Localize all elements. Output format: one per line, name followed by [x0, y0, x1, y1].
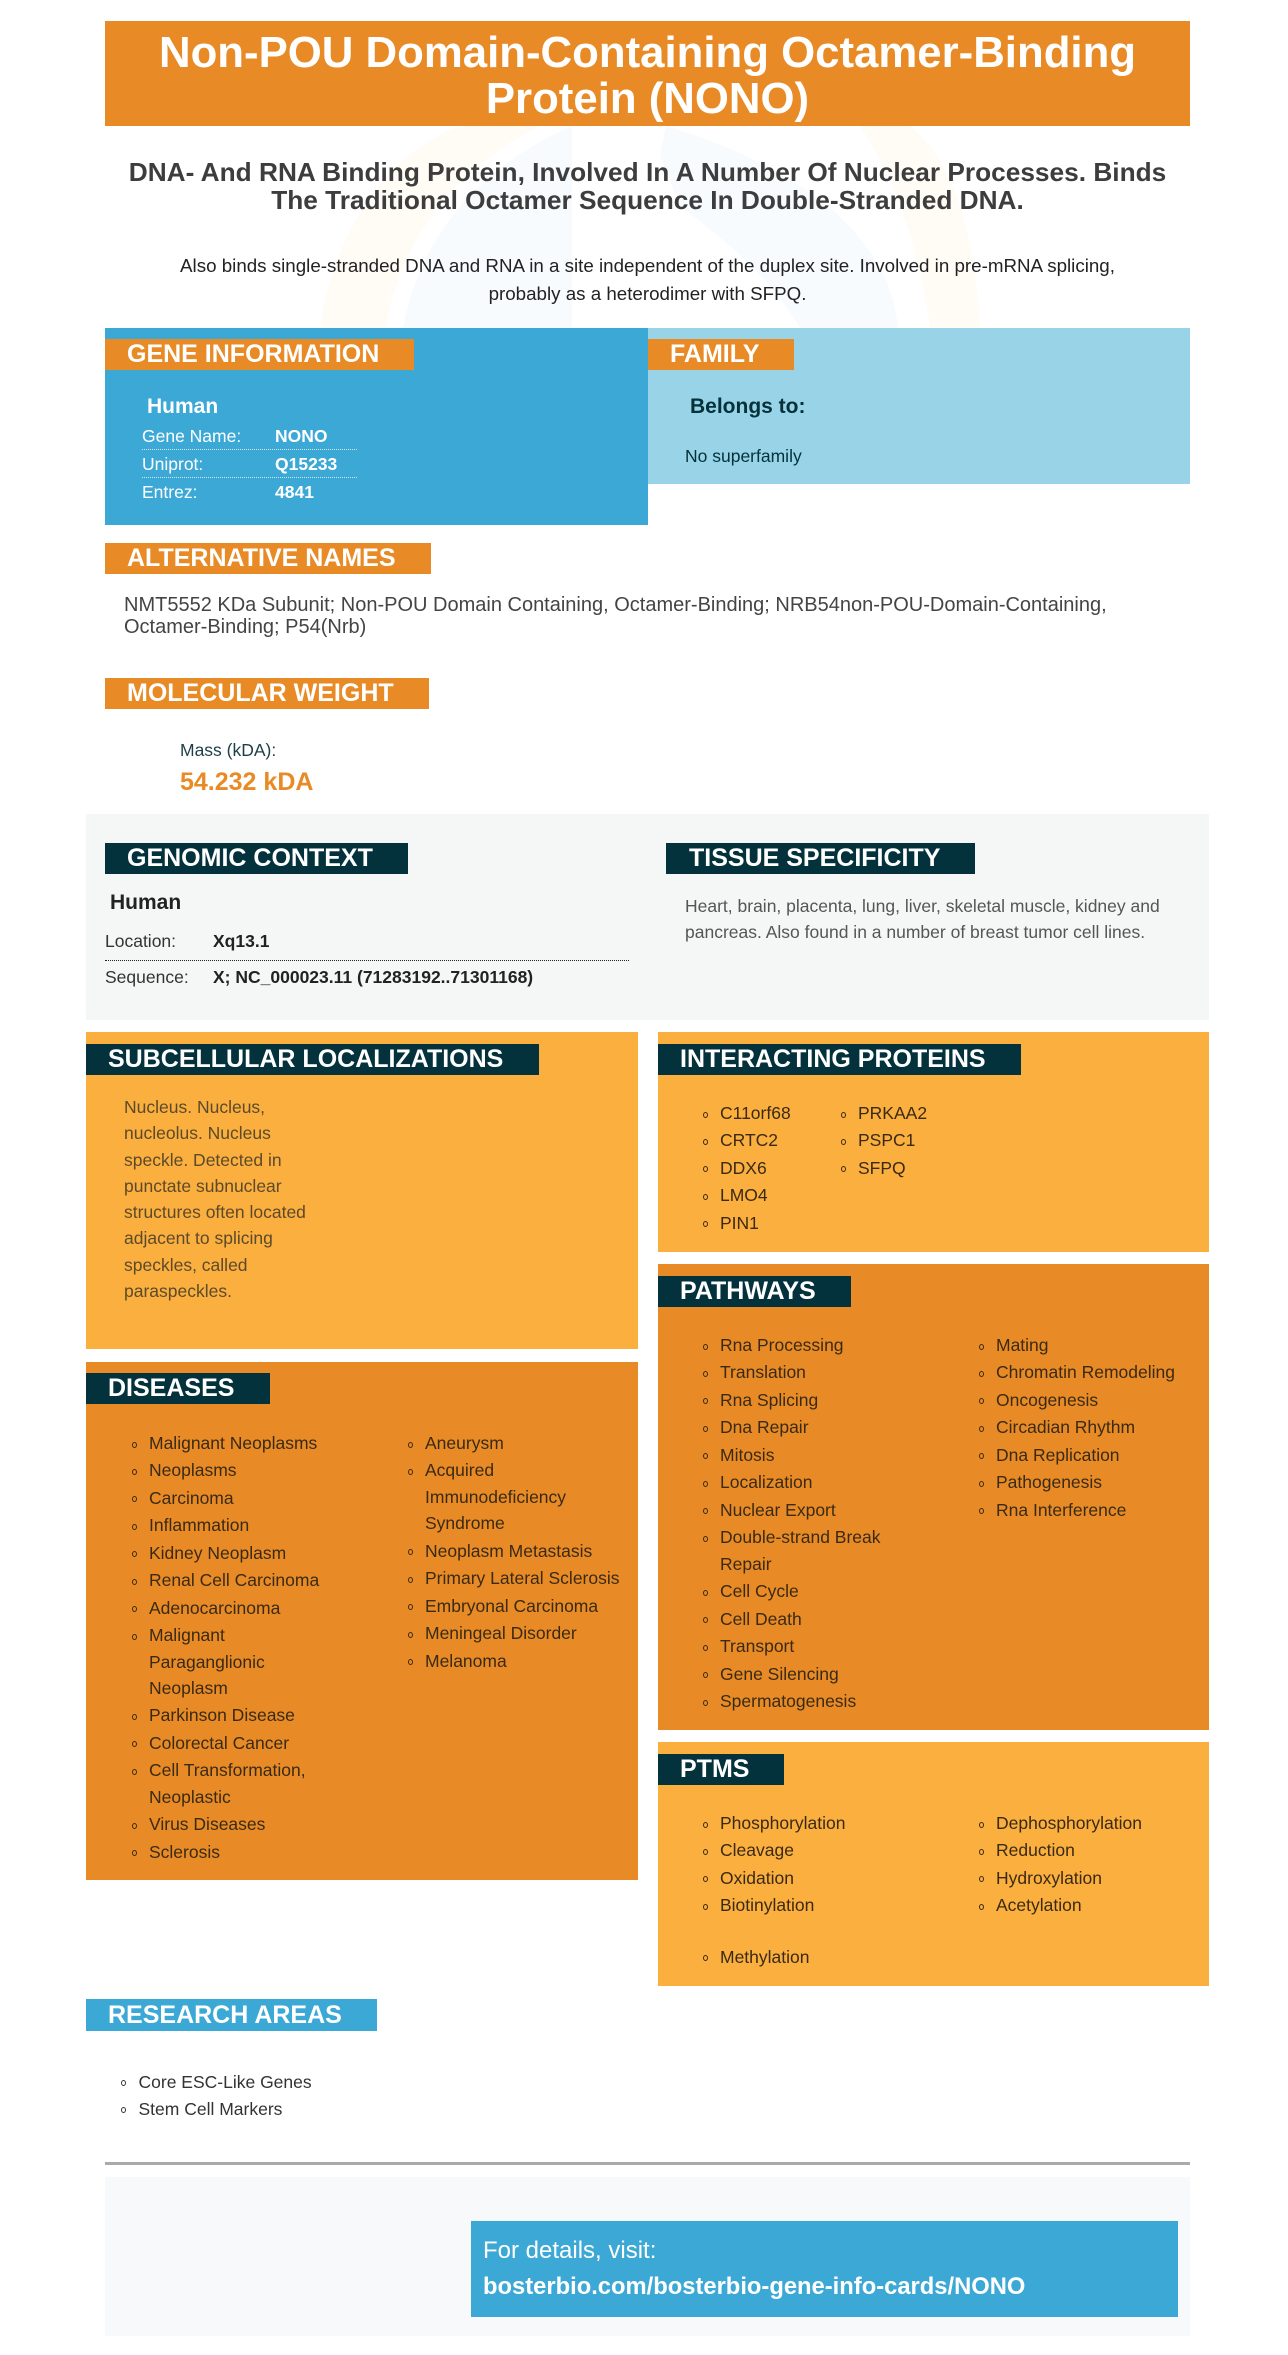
heading: subcellular localizations: SUBCELLULAR LOCALIZATIONS: [108, 1045, 503, 1073]
protein list column 1: CRTC2: [720, 1130, 778, 1150]
disease list column 1: Kidney Neoplasm: [149, 1543, 286, 1563]
pathway list column 1: Mitosis: [720, 1445, 774, 1465]
localization text: speckles, called: [124, 1255, 248, 1275]
pathway list column 1: Rna Processing: [720, 1335, 844, 1355]
heading: family: [648, 339, 794, 370]
species label: Human: [110, 891, 181, 914]
PTM list column 2: Reduction: [996, 1840, 1075, 1860]
localization text: [124, 1097, 306, 1301]
alternative names text: NMT5552 KDa Subunit; Non-POU Domain Containing, Octamer-Binding; NRB54non-POU-Domain-Containing,: [124, 594, 1107, 616]
callout label: For details, visit:: [483, 2237, 656, 2264]
pathway list column 1: Cell Cycle: [720, 1581, 799, 1601]
PTM list column 1: Oxidation: [720, 1868, 794, 1888]
tissue specificity text: [685, 896, 1160, 942]
pathway list column 1: Localization: [720, 1472, 812, 1492]
pathway list column 1: Rna Splicing: [720, 1390, 818, 1410]
pathway list column 1: Spermatogenesis: [720, 1691, 856, 1711]
heading: PTMs: [658, 1754, 784, 1785]
callout url: bosterbio.com/bosterbio-gene-info-cards/NONO: [483, 2273, 1025, 2300]
pathway list column 2: Circadian Rhythm: [996, 1417, 1135, 1437]
disease list column 1: Colorectal Cancer: [149, 1733, 289, 1753]
title: Non-POU Domain-Containing Octamer-Binding: [159, 28, 1136, 77]
callout: details link: [471, 2221, 1178, 2317]
localization text: nucleolus. Nucleus: [124, 1123, 271, 1143]
panel: genomic context and tissue specificity: [86, 814, 1209, 1020]
disease list column 1: Parkinson Disease: [149, 1705, 295, 1725]
pathway list column 1: Cell Death: [720, 1609, 802, 1629]
alternative names text: [124, 594, 1107, 638]
pathway list column 2: Pathogenesis: [996, 1472, 1102, 1492]
heading: research areas: RESEARCH AREAS: [108, 2001, 342, 2029]
heading: interacting proteins: INTERACTING PROTEINS: [680, 1045, 986, 1073]
gene details table: Q15233: [275, 454, 337, 474]
research areas list: Stem Cell Markers: [138, 2099, 282, 2119]
PTM list column 2: Hydroxylation: [996, 1868, 1102, 1888]
panel: pathways: [658, 1264, 1209, 1730]
disease list column 2: Melanoma: [425, 1650, 507, 1670]
disease list column 2: Primary Lateral Sclerosis: [425, 1568, 620, 1588]
protein list column 1: LMO4: [720, 1185, 768, 1205]
protein list column 1: DDX6: [720, 1158, 767, 1178]
subtitle: [129, 157, 1166, 215]
heading: diseases: [86, 1373, 270, 1404]
disease list column 1: Neoplasms: [149, 1460, 237, 1480]
disease list column 1: Virus Diseases: [149, 1814, 265, 1834]
disease list column 2: Embryonal Carcinoma: [425, 1596, 598, 1616]
disease list column 2: Acquired: [425, 1460, 494, 1480]
panel: gene information: [105, 328, 648, 525]
PTM list column 1: [703, 1813, 846, 1967]
heading: pathways: PATHWAYS: [680, 1277, 816, 1305]
PTM list column 1: Cleavage: [720, 1840, 794, 1860]
genomic location table: X; NC_000023.11 (71283192..71301168): [213, 967, 533, 987]
localization text: adjacent to splicing: [124, 1228, 273, 1248]
localization text: speckle. Detected in: [124, 1150, 282, 1170]
PTM list column 1: Phosphorylation: [720, 1813, 846, 1833]
heading: tissue specificity: TISSUE SPECIFICITY: [689, 844, 940, 872]
protein list column 2: PRKAA2: [858, 1103, 927, 1123]
localization text: punctate subnuclear: [124, 1176, 282, 1196]
disease list column 1: Cell Transformation,: [149, 1760, 306, 1780]
gene details table: Gene Name:: [142, 426, 241, 446]
localization text: Nucleus. Nucleus,: [124, 1097, 265, 1117]
PTM list column 2: Dephosphorylation: [996, 1813, 1142, 1833]
description: [180, 254, 1115, 304]
panel: PTMs: [658, 1742, 1209, 1986]
disease list column 1: Renal Cell Carcinoma: [149, 1570, 319, 1590]
genomic location table: Location:: [105, 931, 176, 951]
PTM list column 1: Methylation: [720, 1947, 810, 1967]
pathway list column 2: Oncogenesis: [996, 1390, 1098, 1410]
genomic location table: Xq13.1: [213, 931, 269, 951]
PTM list column 1: Biotinylation: [720, 1895, 814, 1915]
disease list column 1: Paraganglionic: [149, 1652, 265, 1672]
disease list column 2: Aneurysm: [425, 1433, 504, 1453]
disease list column 2: [408, 1433, 620, 1670]
genomic location table: Sequence:: [105, 967, 189, 987]
gene details table: Entrez:: [142, 482, 197, 502]
alternative names text: Octamer-Binding; P54(Nrb): [124, 616, 366, 638]
genomic location table: [105, 931, 629, 987]
protein list column 1: C11orf68: [720, 1103, 791, 1123]
pathway list column 2: Mating: [996, 1335, 1049, 1355]
subtitle: The Traditional Octamer Sequence In Double-Stranded DNA.: [271, 185, 1024, 215]
subtitle: DNA- And RNA Binding Protein, Involved In A Number Of Nuclear Processes. Binds: [129, 157, 1166, 187]
heading: molecular weight: MOLECULAR WEIGHT: [127, 679, 394, 707]
tissue specificity text: Heart, brain, placenta, lung, liver, skeletal muscle, kidney and: [685, 896, 1160, 916]
disease list column 1: Carcinoma: [149, 1488, 234, 1508]
protein list column 2: [841, 1103, 927, 1178]
heading: diseases: DISEASES: [108, 1374, 234, 1402]
localization text: paraspeckles.: [124, 1281, 232, 1301]
superfamily text: No superfamily: [685, 446, 802, 466]
footer panel: [105, 2177, 1190, 2336]
gene details table: NONO: [275, 426, 328, 446]
disease list column 1: Inflammation: [149, 1515, 249, 1535]
gene details table: Uniprot:: [142, 454, 203, 474]
research areas list: [121, 2072, 312, 2119]
description: Also binds single-stranded DNA and RNA in a site independent of the duplex site. Involved in pre-mRNA splicing,: [180, 254, 1115, 276]
pathway list column 2: Dna Replication: [996, 1445, 1120, 1465]
pathway list column 1: Double-strand Break: [720, 1527, 880, 1547]
disease list column 1: Malignant Neoplasms: [149, 1433, 317, 1453]
description: probably as a heterodimer with SFPQ.: [489, 282, 806, 304]
pathway list column 2: [979, 1335, 1175, 1520]
mass label: Mass (kDA):: [180, 740, 276, 760]
tissue specificity text: pancreas. Also found in a number of breast tumor cell lines.: [685, 922, 1145, 942]
localization text: structures often located: [124, 1202, 306, 1222]
title: [105, 21, 1190, 126]
disease list column 1: Sclerosis: [149, 1842, 220, 1862]
mass value: 54.232 kDA: [180, 768, 313, 796]
panel: subcellular localizations: [86, 1032, 638, 1349]
gene details table: [142, 426, 357, 502]
title: Protein (NONO): [486, 74, 809, 123]
gene details table: 4841: [275, 482, 314, 502]
pathway list column 2: Rna Interference: [996, 1500, 1126, 1520]
species label: Human: [147, 395, 218, 418]
disease list column 1: [132, 1433, 320, 1862]
protein list column 2: SFPQ: [858, 1158, 906, 1178]
disease list column 2: Syndrome: [425, 1513, 505, 1533]
pathway list column 1: Transport: [720, 1636, 794, 1656]
heading: family: FAMILY: [670, 340, 759, 368]
disease list column 1: Malignant: [149, 1625, 225, 1645]
pathway list column 1: Dna Repair: [720, 1417, 809, 1437]
panel: family: [648, 328, 1190, 484]
protein list column 2: PSPC1: [858, 1130, 915, 1150]
PTM list column 2: [979, 1813, 1142, 1915]
belongs to label: Belongs to:: [690, 395, 806, 418]
protein list column 1: [703, 1103, 791, 1233]
research areas list: Core ESC-Like Genes: [138, 2072, 312, 2092]
pathway list column 1: [703, 1335, 880, 1711]
pathway list column 1: Gene Silencing: [720, 1664, 839, 1684]
disease list column 2: Immunodeficiency: [425, 1487, 566, 1507]
heading: alternative names: ALTERNATIVE NAMES: [127, 544, 396, 572]
heading: PTMs: PTMS: [680, 1755, 749, 1783]
panel: diseases: [86, 1362, 638, 1880]
disease list column 2: Meningeal Disorder: [425, 1623, 577, 1643]
disease list column 1: Neoplastic: [149, 1787, 231, 1807]
PTM list column 2: Acetylation: [996, 1895, 1082, 1915]
heading: genomic context: GENOMIC CONTEXT: [127, 844, 373, 872]
pathway list column 1: Translation: [720, 1362, 806, 1382]
molecular weight value: [180, 740, 313, 796]
background watermark: [320, 126, 980, 328]
pathway list column 2: Chromatin Remodeling: [996, 1362, 1175, 1382]
disease list column 2: Neoplasm Metastasis: [425, 1541, 592, 1561]
disease list column 1: Adenocarcinoma: [149, 1598, 280, 1618]
heading: gene information: GENE INFORMATION: [127, 340, 379, 368]
heading: pathways: [658, 1276, 851, 1307]
pathway list column 1: Repair: [720, 1554, 772, 1574]
panel: interacting proteins: [658, 1032, 1209, 1252]
disease list column 1: Neoplasm: [149, 1678, 228, 1698]
protein list column 1: PIN1: [720, 1213, 759, 1233]
pathway list column 1: Nuclear Export: [720, 1500, 836, 1520]
